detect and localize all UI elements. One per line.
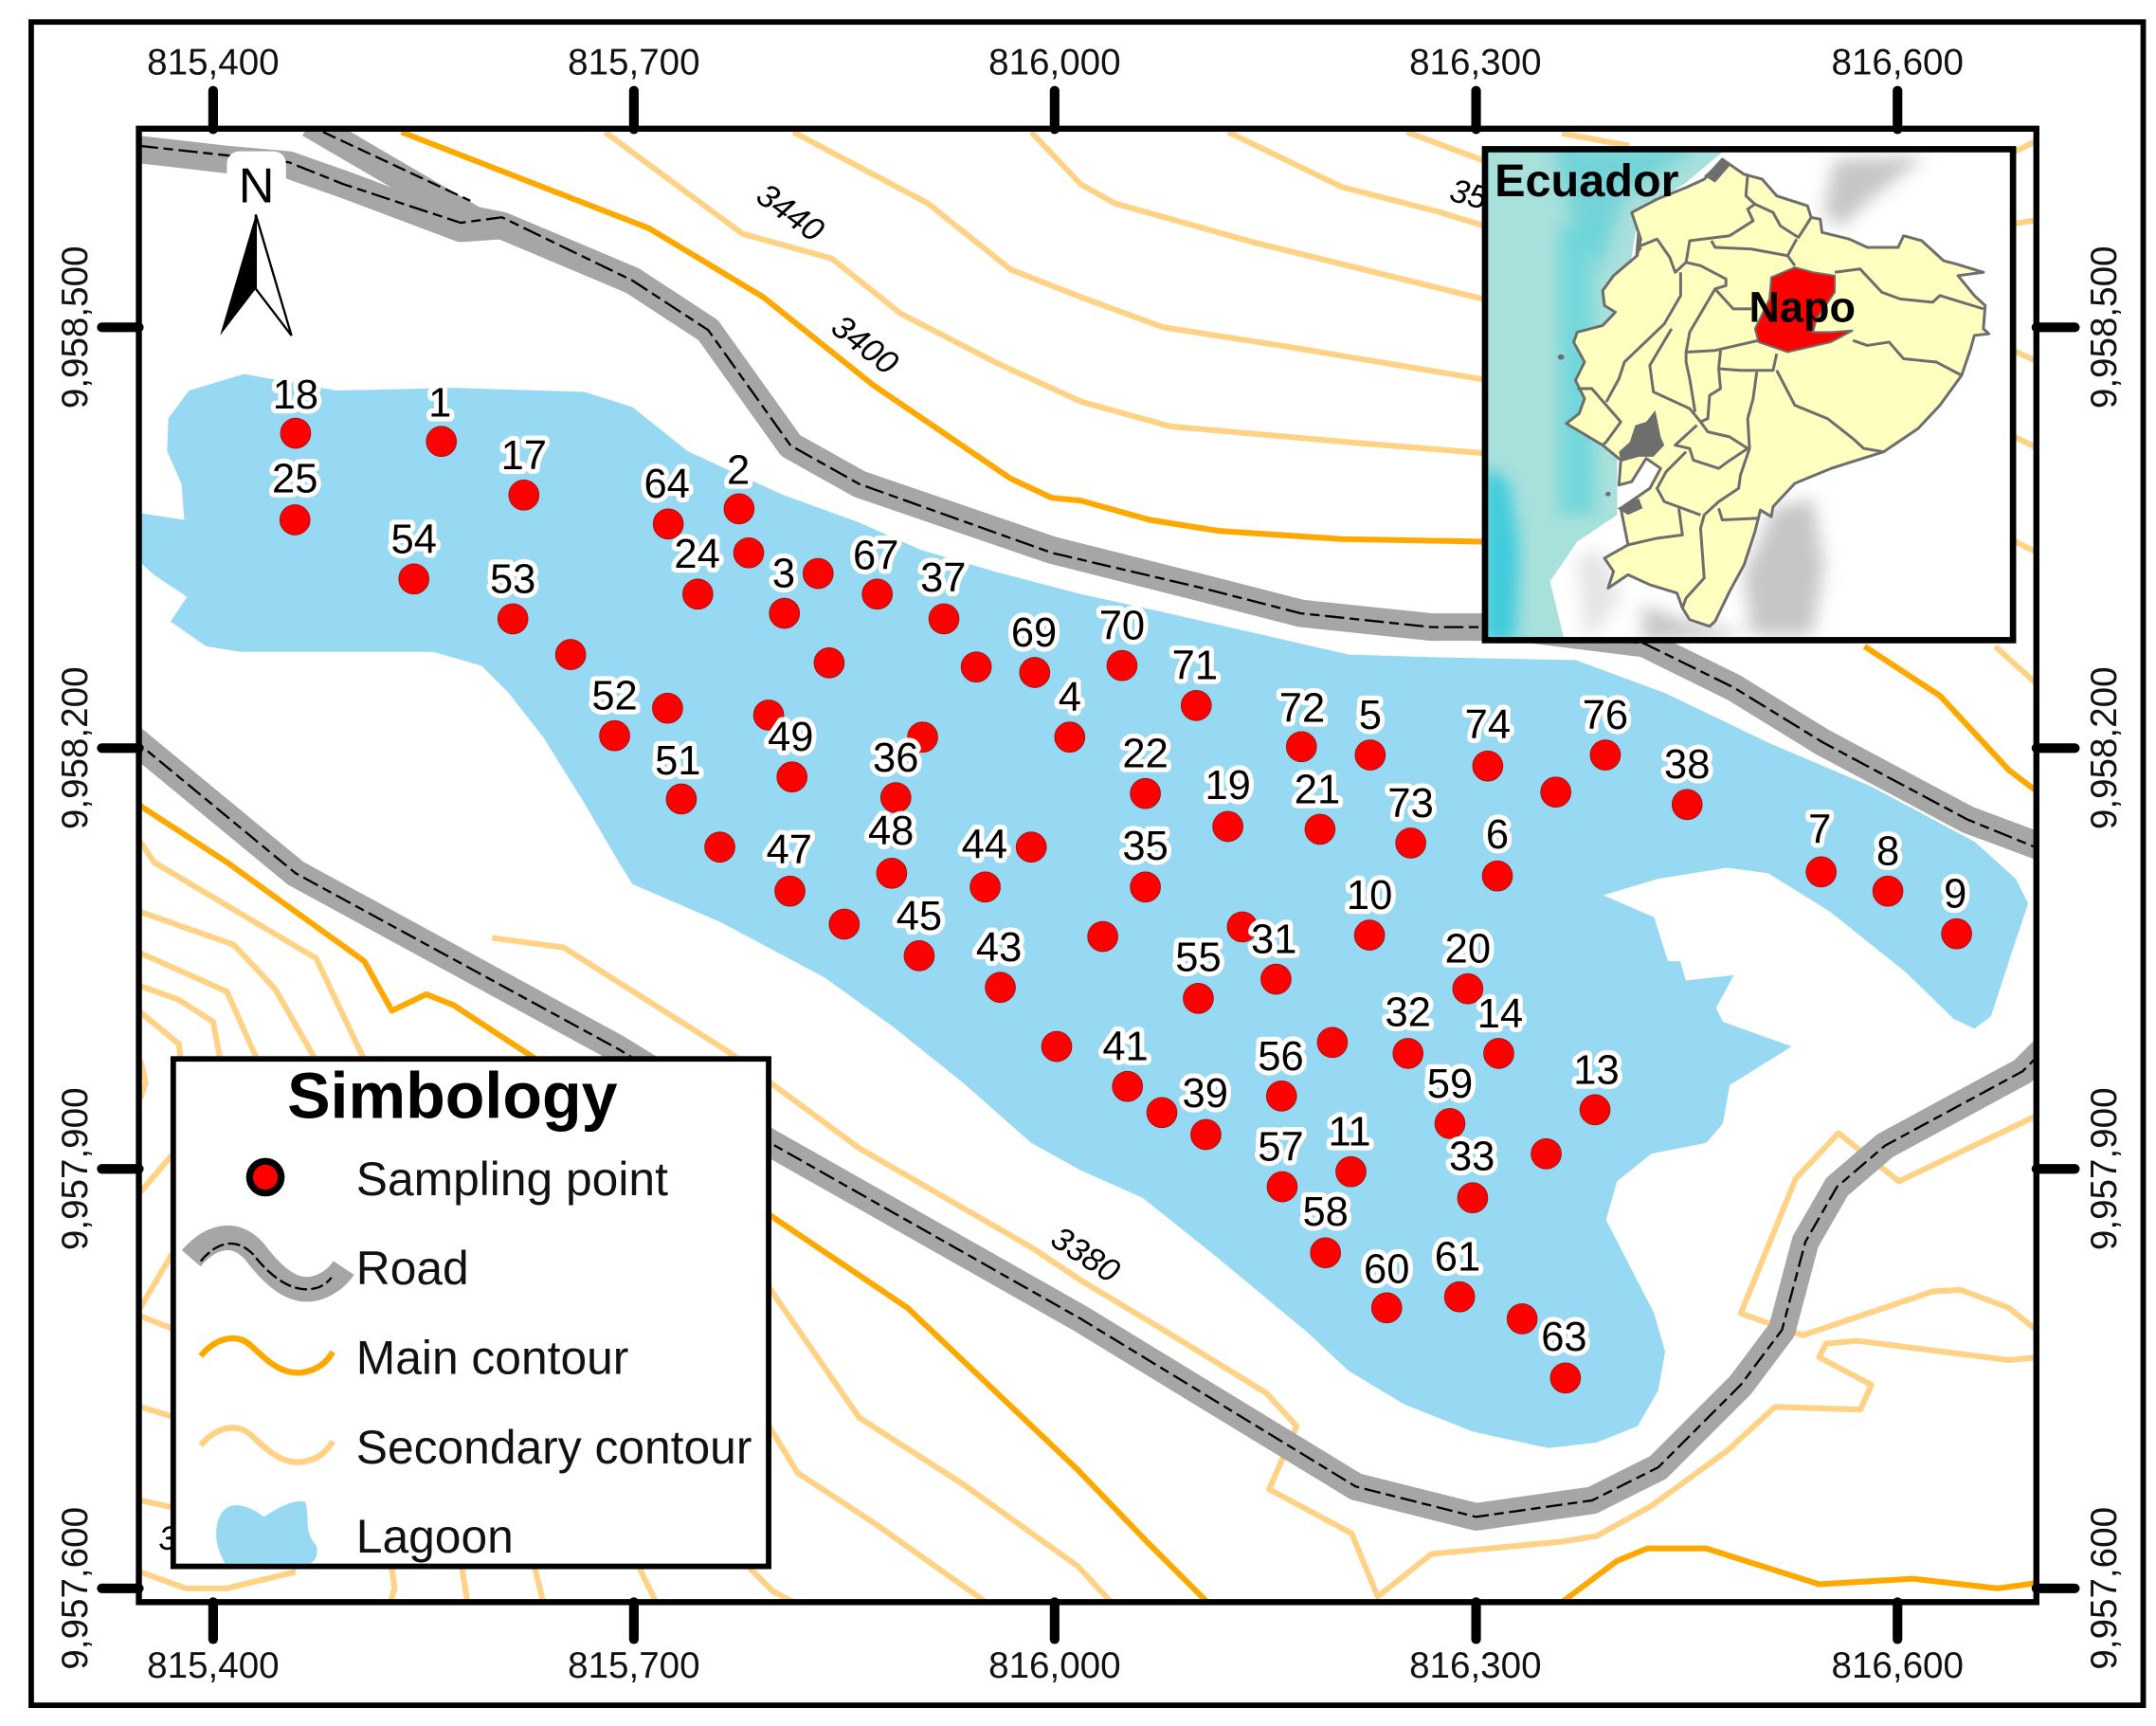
provinces <box>1567 159 1989 627</box>
sampling point number labels: 56 <box>1258 1034 1304 1080</box>
legend: sampling point: Sampling point <box>356 1153 668 1206</box>
sampling point number labels: 5 <box>1359 693 1382 738</box>
sampling point number labels: 7 <box>1808 807 1831 852</box>
sampling point number labels: 20 <box>1445 927 1491 972</box>
sampling point number labels: 54 <box>391 517 437 562</box>
left northing labels: 9,958,500 <box>55 246 96 409</box>
lagoon <box>139 374 2028 1448</box>
contour label 3400: 3400 <box>824 308 905 382</box>
sampling point markers <box>280 418 1972 1393</box>
sampling point number labels <box>272 372 1966 1360</box>
right northing labels: 9,957,600 <box>2084 1507 2125 1670</box>
left northing labels: 9,958,200 <box>55 666 96 829</box>
sampling point number labels: 31 <box>1251 917 1296 962</box>
legend: secondary contour: Secondary contour <box>356 1421 752 1474</box>
contour label 35: 35 <box>1446 172 1492 217</box>
sampling point number labels: 61 <box>1435 1235 1480 1281</box>
top easting labels: 816,300 <box>1409 42 1542 82</box>
top easting labels: 816,600 <box>1832 42 1964 82</box>
sampling point number labels: 19 <box>1205 763 1251 808</box>
contour label fragment behind legend: 3 <box>158 1520 177 1557</box>
sampling point number labels: 55 <box>1175 935 1222 980</box>
right northing labels: 9,957,900 <box>2084 1087 2125 1250</box>
bottom easting labels: 816,300 <box>1409 1645 1542 1686</box>
sampling point number labels: 36 <box>873 736 918 781</box>
sampling point number labels: 76 <box>1583 693 1628 738</box>
sampling point number labels: 21 <box>1295 767 1340 812</box>
bottom easting labels: 816,600 <box>1832 1645 1964 1686</box>
sampling point number labels: 10 <box>1347 873 1392 918</box>
legend title: Simbology <box>287 1061 618 1133</box>
sampling point number labels: 14 <box>1477 991 1523 1037</box>
sampling point number labels: 4 <box>1059 675 1081 720</box>
legend: road: Road <box>356 1242 469 1295</box>
sampling point number labels: 64 <box>643 462 690 507</box>
province borders <box>1577 174 1984 608</box>
bottom easting labels: 815,400 <box>147 1645 280 1686</box>
sampling point number labels: 59 <box>1427 1062 1473 1107</box>
sampling point number labels: 69 <box>1011 610 1057 656</box>
top easting labels <box>147 42 1964 82</box>
sampling point number labels: 11 <box>1328 1110 1371 1155</box>
sampling point number labels: 17 <box>501 433 547 479</box>
bottom easting labels: 815,700 <box>568 1645 700 1686</box>
sampling point number labels: 38 <box>1664 742 1710 788</box>
sampling point number labels: 24 <box>674 532 720 577</box>
sampling point number labels: 52 <box>591 674 638 719</box>
terrain shading <box>1577 156 1926 642</box>
gray areas <box>1558 159 1730 515</box>
legend: main contour: Main contour <box>356 1331 628 1384</box>
north arrow <box>220 152 292 336</box>
sampling point number labels: 35 <box>1122 824 1169 869</box>
sampling point number labels: 51 <box>655 738 700 784</box>
left northing labels: 9,957,900 <box>55 1087 96 1250</box>
left northing labels: 9,957,600 <box>55 1507 96 1670</box>
legend panel <box>173 1059 769 1567</box>
sampling point number labels: 3 <box>772 552 795 597</box>
road south <box>131 737 2049 1517</box>
sampling point number labels: 25 <box>272 456 317 501</box>
sampling point number labels: 43 <box>976 925 1022 971</box>
top easting labels: 815,400 <box>147 42 280 82</box>
sampling point number labels: 9 <box>1944 872 1966 918</box>
ocean <box>1483 146 1730 642</box>
top easting labels: 815,700 <box>568 42 700 82</box>
sampling point number labels: 44 <box>962 822 1007 867</box>
inset map: Ecuador <box>1483 146 2013 642</box>
sampling point number labels: 63 <box>1541 1315 1587 1360</box>
legend: main contour <box>201 1331 628 1384</box>
map area <box>131 124 2049 1602</box>
main contour lines <box>140 132 2038 1602</box>
sampling point number labels: 60 <box>1364 1247 1409 1293</box>
province: Napo <box>1755 267 1853 352</box>
road north <box>131 124 2049 853</box>
sampling point number labels: 74 <box>1465 702 1511 748</box>
sampling point number labels: 32 <box>1386 990 1431 1035</box>
right northing labels <box>2084 246 2125 1670</box>
sampling point number labels: 71 <box>1172 644 1218 689</box>
sampling point number labels: 70 <box>1099 604 1145 649</box>
sampling point number labels: 22 <box>1122 732 1169 777</box>
bottom easting labels <box>147 1645 1964 1686</box>
sampling point number labels: 1 <box>428 381 451 427</box>
sampling point number labels: 37 <box>920 555 967 601</box>
right northing labels: 9,958,200 <box>2084 666 2125 829</box>
contour label 3380: 3380 <box>1044 1219 1127 1291</box>
north arrow: N <box>239 158 274 213</box>
top easting labels: 816,000 <box>988 42 1121 82</box>
sampling point number labels: 39 <box>1183 1071 1228 1117</box>
legend: lagoon <box>216 1501 514 1567</box>
inset label: Napo: Napo <box>1749 283 1856 332</box>
sampling point number labels: 73 <box>1387 781 1434 827</box>
right northing labels: 9,958,500 <box>2084 246 2125 409</box>
sampling point number labels: 33 <box>1449 1135 1495 1180</box>
inset border <box>1485 149 2013 640</box>
legend: road <box>191 1238 469 1295</box>
sampling point number labels: 49 <box>768 715 813 760</box>
sampling point number labels: 58 <box>1302 1190 1349 1235</box>
sampling point number labels: 57 <box>1258 1125 1304 1171</box>
sampling point number labels: 13 <box>1573 1047 1620 1093</box>
bottom easting labels: 816,000 <box>988 1645 1121 1686</box>
inset title: Ecuador: Ecuador <box>1495 155 1679 207</box>
sampling point number labels: 6 <box>1486 812 1509 858</box>
sampling point number labels: 45 <box>897 894 942 939</box>
sampling point number labels: 53 <box>490 556 535 602</box>
sampling point number labels: 48 <box>868 808 914 854</box>
legend: lagoon: Lagoon <box>356 1510 514 1563</box>
sampling point number labels: 67 <box>853 534 898 579</box>
sampling point number labels: 8 <box>1876 829 1899 875</box>
secondary contour lines <box>140 132 2038 1602</box>
sampling point number labels: 18 <box>273 372 318 418</box>
map neatline <box>139 129 2037 1602</box>
sampling point number labels: 47 <box>767 827 812 873</box>
sampling point number labels: 41 <box>1102 1025 1149 1070</box>
contour label 3440: 3440 <box>750 176 831 249</box>
left northing labels <box>55 246 96 1670</box>
sampling point number labels: 2 <box>727 448 750 494</box>
sampling point number labels: 72 <box>1279 686 1325 732</box>
